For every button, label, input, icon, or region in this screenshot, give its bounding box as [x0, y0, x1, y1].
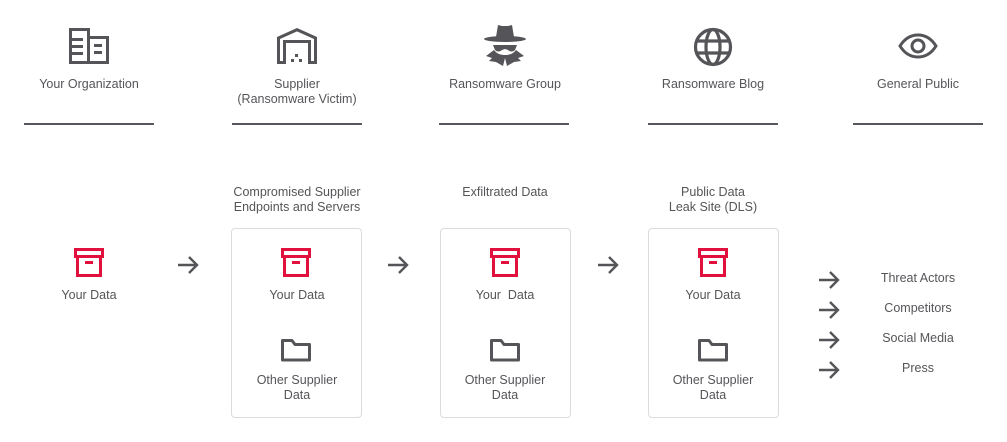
panel: exfiltrated data: Other Supplier — [465, 373, 545, 387]
panel: exfiltrated data: Your Data — [476, 288, 534, 302]
panel: public data leak site: Leak Site (DLS) — [669, 200, 757, 214]
panel: public data leak site — [648, 185, 779, 418]
panel: public data leak site: Data — [700, 388, 726, 402]
panel: compromised supplier — [231, 185, 362, 418]
label: Supplier: (Ransomware Victim) — [237, 92, 357, 106]
panel: exfiltrated data — [440, 185, 571, 418]
icon: globe — [694, 28, 732, 66]
label: Ransomware Blog: Ransomware Blog — [662, 77, 764, 91]
item: your data (organization): Your Data — [61, 288, 117, 302]
panel: exfiltrated data: Data — [492, 388, 518, 402]
panel: exfiltrated data: Exfiltrated Data — [462, 185, 548, 199]
icon: eye — [898, 34, 938, 58]
panel: compromised supplier: Other Supplier — [257, 373, 337, 387]
item: your data (organization) — [61, 248, 117, 302]
label: Supplier — [237, 77, 357, 106]
arrow 1 — [178, 256, 199, 274]
panel: compromised supplier: Data — [284, 388, 310, 402]
icon: supplier warehouse — [277, 28, 317, 64]
icon: ransomware group spy — [484, 25, 526, 66]
label: Ransomware Group: Ransomware Group — [449, 77, 561, 91]
panel: compromised supplier: Your Data — [269, 288, 325, 302]
panel: compromised supplier: Endpoints and Servers — [234, 200, 360, 214]
icon: organization building — [69, 28, 109, 64]
panel: public data leak site: Your Data — [685, 288, 741, 302]
label: Your Organization: Your Organization — [39, 77, 139, 91]
label: General Public: General Public — [877, 77, 959, 91]
list: general public audiences: Threat Actors — [881, 271, 955, 285]
arrow 2 — [388, 256, 409, 274]
label: Supplier: Supplier — [274, 77, 320, 91]
panel: compromised supplier: Compromised Supplier — [233, 185, 361, 199]
arrow 3 — [598, 256, 619, 274]
panel: public data leak site: Public Data — [681, 185, 745, 199]
list: general public audiences: Press — [902, 361, 934, 375]
list: general public audiences — [819, 271, 955, 379]
list: general public audiences: Competitors — [884, 301, 952, 315]
list: general public audiences: Social Media — [882, 331, 954, 345]
panel: public data leak site: Other Supplier — [673, 373, 753, 387]
